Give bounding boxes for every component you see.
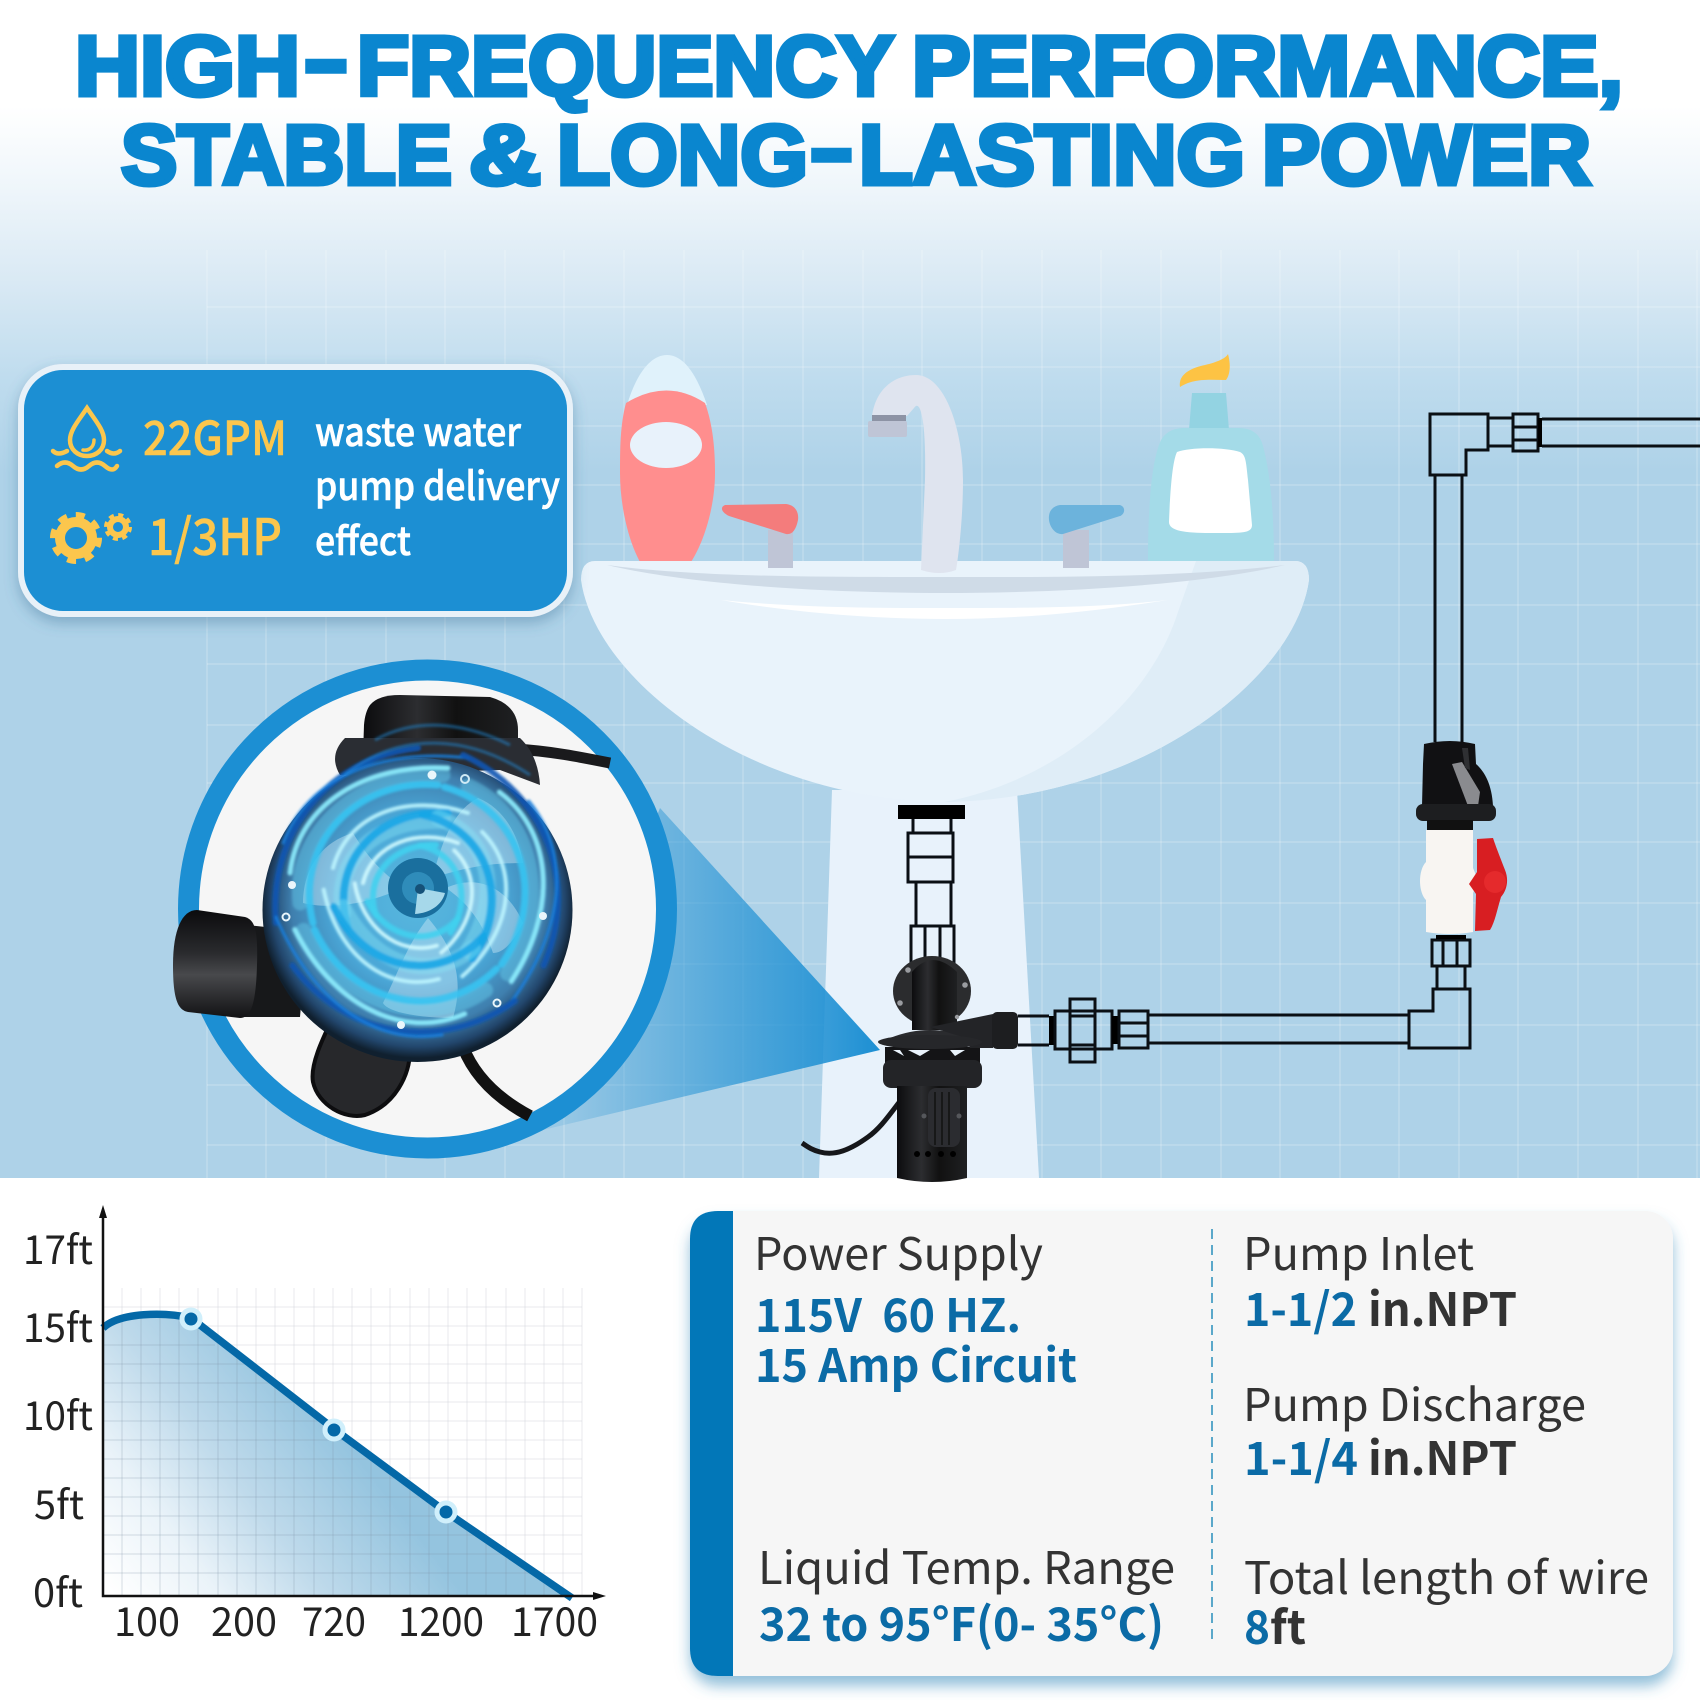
- wire length: 8: [1244, 1592, 1270, 1658]
- lower cable: [463, 1047, 530, 1116]
- flange: [335, 738, 540, 785]
- pump inlet: in.NPT: [1368, 1274, 1517, 1340]
- power supply: 15 Amp Circuit: [755, 1330, 1077, 1396]
- horizontal discharge run: [1018, 935, 1470, 1062]
- x axis labels: 100: [114, 1590, 180, 1648]
- flange dome: [890, 1030, 970, 1038]
- title: [75, 12, 1623, 202]
- curve: [103, 1314, 572, 1598]
- vertical outlet: [912, 960, 957, 1030]
- title: -: [810, 101, 853, 195]
- flange: [878, 1035, 982, 1049]
- y axis labels: 10ft: [23, 1384, 93, 1442]
- magnifier circle with pump close-up: [173, 670, 666, 1148]
- x axis labels: 720: [302, 1590, 366, 1648]
- power cable: [802, 1083, 915, 1153]
- red lotion bottle: [620, 355, 715, 562]
- power supply: Power Supply: [754, 1218, 1043, 1283]
- swirl streaks: [267, 748, 615, 1089]
- motor body: [897, 1086, 967, 1182]
- y axis labels: 17ft: [23, 1218, 93, 1276]
- power supply: [754, 1218, 1077, 1396]
- chart grid over area: [103, 1316, 544, 1596]
- y axis labels: 5ft: [34, 1473, 84, 1531]
- text: waste water pump delivery effect: [315, 402, 560, 567]
- pump discharge: 1-1/4: [1244, 1423, 1358, 1489]
- text: waste water pump delivery effect: waste water: [315, 402, 522, 458]
- liquid temperature range: Liquid Temp. Range: [758, 1532, 1175, 1597]
- x axis labels: [114, 1590, 598, 1648]
- blue side bar: [690, 1211, 733, 1676]
- panel: specifications: [690, 1211, 1673, 1676]
- title: FREQUENCY: [357, 19, 894, 113]
- swirl over flange: [345, 725, 530, 775]
- x axis labels: 200: [211, 1590, 277, 1648]
- x axis labels: 1200: [398, 1590, 484, 1648]
- sink basin: [581, 561, 1309, 802]
- soap bottle: [1148, 354, 1274, 562]
- title: POWER: [1262, 108, 1591, 202]
- wire length: Total length of wire: [1244, 1542, 1649, 1607]
- upper cable: [515, 749, 610, 763]
- swirling impeller disc: [262, 748, 615, 1089]
- pump discharge: in.NPT: [1368, 1423, 1517, 1489]
- side inlet: [173, 910, 305, 1018]
- text: waste water pump delivery effect: pump delivery: [315, 456, 560, 512]
- area under curve: [103, 1314, 569, 1596]
- text: waste water pump delivery effect: effect: [315, 511, 411, 567]
- y axis labels: 0ft: [33, 1561, 83, 1619]
- title: -: [304, 12, 348, 106]
- vertical run and upper elbow: [1430, 414, 1700, 742]
- callout: performance stats: [21, 367, 570, 614]
- axes: [103, 1212, 600, 1596]
- discharge nozzle: [930, 1014, 993, 1048]
- legs: [885, 1047, 980, 1063]
- title: HIGH: [75, 19, 300, 113]
- right tap handle: [1049, 505, 1124, 568]
- title: PERFORMANCE,: [912, 19, 1623, 113]
- background wall: [0, 0, 1700, 1180]
- sink pedestal: [819, 790, 1039, 1178]
- magnifier cone: [530, 808, 880, 1133]
- icon: gears: [53, 515, 130, 561]
- y axis labels: 15ft: [23, 1296, 93, 1354]
- wall tile grid: [207, 250, 1700, 1178]
- text: 1/3HP: 1/3HP: [148, 498, 282, 570]
- title: STABLE: [121, 108, 452, 202]
- white valve body: [1420, 830, 1478, 934]
- ring: [883, 1060, 982, 1088]
- performance chart: [23, 1205, 606, 1648]
- drain tailpiece: [898, 805, 965, 970]
- title: &: [469, 108, 541, 202]
- black union: [1422, 741, 1493, 806]
- wire length: [1244, 1542, 1649, 1658]
- pump inlet: 1-1/2: [1244, 1274, 1357, 1340]
- screws: [282, 770, 547, 1029]
- pump discharge: Pump Discharge: [1243, 1369, 1586, 1434]
- title: LONG: [557, 108, 808, 202]
- text: 22GPM: 22GPM: [143, 400, 287, 469]
- faucet: [868, 375, 963, 573]
- power supply: 115V 60 HZ.: [755, 1280, 1021, 1346]
- icon: water drop: [53, 408, 120, 470]
- ball valve: [1416, 741, 1507, 934]
- chart grid: [103, 1288, 582, 1596]
- pump inlet: [1243, 1218, 1517, 1340]
- red handle: [1469, 838, 1507, 931]
- title: LASTING: [859, 108, 1245, 202]
- hub: [388, 858, 448, 918]
- volute mount disc: [893, 956, 971, 1026]
- data points: [182, 1310, 455, 1521]
- lower white section: [0, 1178, 1700, 1700]
- translucent blades: [303, 798, 523, 1018]
- foot: [313, 1017, 410, 1116]
- top cap: [363, 695, 518, 755]
- y axis labels: [23, 1218, 93, 1619]
- pump discharge: [1243, 1369, 1586, 1489]
- pump: [802, 956, 1018, 1182]
- wire length: ft: [1270, 1592, 1306, 1658]
- pump inlet: Pump Inlet: [1243, 1218, 1474, 1283]
- liquid temperature range: 32 to 95°F(0- 35°C): [759, 1589, 1164, 1655]
- x axis labels: 1700: [511, 1590, 598, 1648]
- liquid temperature range: [758, 1532, 1175, 1655]
- plumbing outlines: [898, 414, 1700, 1062]
- left tap handle: [722, 504, 798, 568]
